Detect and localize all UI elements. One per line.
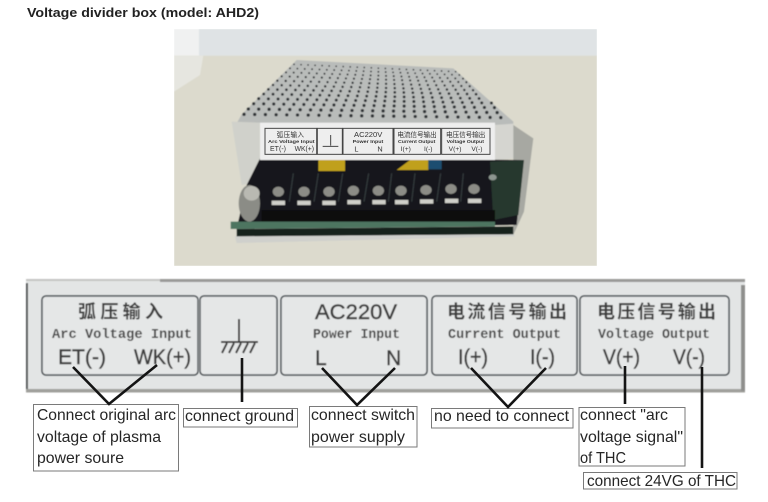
small terminal label in the photo: N	[377, 145, 383, 154]
label background	[26, 279, 745, 392]
panel: voltage output: 电压信号输出	[597, 301, 716, 322]
connector: I+ and I- to callout	[471, 368, 546, 407]
panel: voltage output: Voltage Output	[598, 328, 710, 343]
panel: voltage output: V(+)	[603, 346, 640, 369]
connector: V+ to callout	[624, 366, 626, 404]
small terminal label in the photo	[265, 128, 490, 154]
panel: arc voltage input	[42, 296, 198, 375]
callout: switch power supply	[310, 406, 417, 447]
panel: current output: I(+)	[458, 346, 488, 369]
callout: arc voltage input: Connect original arc	[37, 407, 176, 424]
small terminal label in the photo: AC220V	[354, 130, 382, 139]
panel: arc voltage input: Arc Voltage Input	[52, 328, 192, 343]
panel: current output	[432, 296, 577, 375]
photo: voltage divider box	[174, 29, 597, 266]
panel: current output: I(-)	[530, 346, 555, 369]
small terminal label in the photo: 电流信号输出	[397, 130, 437, 139]
callout: arc voltage input: voltage of plasma	[37, 429, 161, 446]
panel: current output: 电流信号输出	[447, 301, 567, 322]
small terminal label in the photo: Power Input	[353, 139, 384, 144]
panel: ground	[200, 296, 277, 375]
panel: power input: AC220V	[315, 301, 397, 324]
callout: arc voltage signal	[579, 407, 685, 467]
connector: L and N to callout	[322, 368, 395, 405]
small terminal label in the photo: Arc Voltage Input	[268, 139, 315, 144]
title: Voltage divider box (model: AHD2)	[27, 5, 259, 20]
small terminal label in the photo: 弧压输入	[277, 130, 304, 139]
callout: arc voltage input	[34, 404, 178, 471]
panel: power input: N	[386, 347, 401, 370]
panel: arc voltage input: 弧压输入	[78, 301, 163, 322]
connector: V- to callout	[701, 367, 703, 468]
small terminal label in the photo: V(-)	[471, 146, 482, 153]
panel: arc voltage input: ET(-)	[58, 346, 106, 369]
callout: arc voltage signal: connect "arc	[580, 407, 668, 424]
panel: power input: L	[315, 347, 327, 370]
callout: arc voltage input: power soure	[37, 450, 124, 467]
connector: ET and WK to callout	[73, 365, 157, 404]
connector: ground to callout	[241, 358, 243, 402]
panel: current output: Current Output	[448, 328, 561, 343]
panel: voltage output	[580, 296, 729, 375]
callout: switch power supply: power supply	[311, 429, 405, 446]
panel: arc voltage input: WK(+)	[134, 346, 191, 369]
callout: ground: connect ground	[185, 408, 294, 425]
small terminal label in the photo: I(-)	[424, 146, 432, 153]
panel: power input: Power Input	[313, 328, 400, 343]
callout: arc voltage signal: voltage signal"	[580, 429, 683, 446]
callout: no need to connect: no need to connect	[434, 408, 570, 425]
small terminal label in the photo: Voltage Output	[447, 139, 484, 144]
small terminal label in the photo: ET(-)	[270, 144, 286, 153]
small terminal label in the photo: 电压信号输出	[446, 130, 485, 139]
small terminal label in the photo: Current Output	[398, 139, 436, 144]
small terminal label in the photo: L	[354, 145, 358, 154]
callout: switch power supply: connect switch	[311, 407, 415, 424]
enlarged terminal label strip	[26, 279, 745, 392]
panel: power input	[281, 296, 427, 375]
small terminal label in the photo: I(+)	[401, 146, 411, 153]
small terminal label in the photo: V(+)	[449, 146, 461, 153]
small terminal label in the photo: WK(+)	[295, 144, 314, 153]
callout: arc voltage signal: of THC	[580, 450, 626, 467]
panel: voltage output: V(-)	[673, 346, 705, 369]
callout: 24VG: connect 24VG of THC	[587, 473, 736, 490]
